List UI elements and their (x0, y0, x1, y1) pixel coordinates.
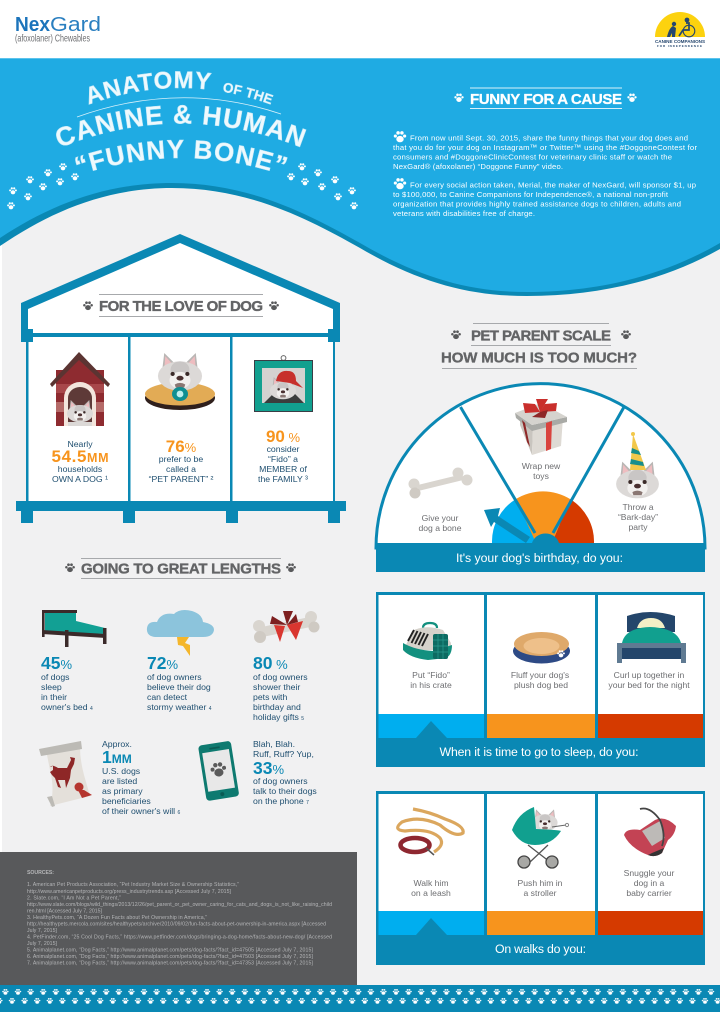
label: carrier: baby carrier (626, 888, 672, 898)
stat: 54.5MM households: 54.5MM (52, 447, 108, 466)
label: dog bed: plush dog bed (514, 680, 568, 690)
panel: sources: 2. Slate.com, “I Am Not a Pet Parent,” (27, 896, 121, 902)
stat: 33% talk on phone: on the phone 7 (253, 796, 309, 806)
label: leash (411, 878, 451, 898)
stat: 72% stormy weather: stormy weather 4 (147, 702, 212, 712)
stat: 45% sleep in bed: owner's bed 4 (41, 702, 93, 712)
icon: phone (198, 741, 239, 801)
panel: sources: 1. American Pet Products Association, “Pet Industry Market Size & Ownership Statistics,” (27, 882, 239, 888)
gauge dial (460, 407, 624, 543)
stat: 90% member of family: MEMBER of (259, 464, 307, 474)
header wave (0, 58, 720, 296)
stat: 54.5MM households: Nearly (67, 439, 93, 449)
icon: leash and collar (398, 809, 463, 855)
text block: campaign: consumers and #DoggoneClinicContest for veterinary clinic staff or watch the (393, 152, 672, 162)
label: dog bed: Fluff your dog's (511, 670, 569, 680)
icon: stroller (512, 807, 569, 868)
label: give a bone: dog a bone (418, 523, 462, 533)
footer paw band (0, 985, 720, 1012)
stat: 80% gifts: pets with (253, 692, 287, 702)
stat: 54.5MM households: households (58, 464, 103, 474)
text block: campaign: to $100,000, to Canine Companions for Independence®, a national non-profit (393, 190, 669, 199)
text block: campaign: organization that provides highly trained assistance dogs to children, adults and (393, 200, 681, 208)
logo: NexGard: Nex (15, 14, 50, 36)
stat: 33% talk on phone: talk to their dogs (253, 786, 317, 796)
title: ANATOMY (88, 71, 212, 105)
stat: 54.5MM households: OWN A DOG ¹ (52, 474, 108, 484)
logo: Canine Companions: FOR INDEPENDENCE (657, 44, 702, 48)
title (56, 71, 306, 171)
icon: baby carrier (624, 808, 676, 856)
stat: 45% sleep in bed: of dogs (41, 672, 70, 682)
stat: 54.5MM households (52, 439, 108, 484)
panel: sources: ren.html [Accessed July 7, 2015] (27, 908, 103, 914)
heading: Funny for a Cause: FUNNY FOR A CAUSE (470, 91, 622, 108)
panel: sources: 6. Animalplanet.com, “Dog Facts,” http://www.animalplanet.com/pets/dog-facts/?fact_id=47503 [Accessed July 7, 2015] (27, 954, 314, 960)
icon: storm cloud (147, 610, 214, 656)
left margin strip (0, 58, 2, 1012)
heading: Going to Great Lengths: GOING TO GREAT LENGTHS (81, 560, 281, 578)
stat: 76% pet parent: prefer to be (159, 454, 203, 464)
panel: sources: http://healthypets.mercola.com/sites/healthypets/archive/2010/09/02/fun-facts-about-pet-ownership-in-america.aspx [Accessed (27, 922, 326, 928)
title: OF THE (223, 82, 274, 105)
white top band (0, 0, 720, 58)
label: throw a party: Throw a (622, 502, 654, 512)
stat: 90% member of family: 90 % (266, 427, 300, 446)
panel: sources: http://www.slate.com/blogs/wild_things/2013/12/26/pet_parent_or_pet_owner_caring_for_cats_and_dogs_is_not_like_raising_child (27, 902, 332, 908)
stat: 1MM beneficiaries: beneficiaries (102, 796, 151, 806)
label: wrap new toys: Wrap new (522, 461, 561, 471)
panel: sleep (376, 592, 705, 767)
caption bar: On walks do you: (495, 942, 586, 956)
panel: birthday gauge (376, 384, 705, 572)
stat: 90% member of family: consider (267, 444, 300, 454)
heading: Pet Parent Scale: PET PARENT SCALE (471, 328, 611, 344)
label: leash: on a leash (411, 888, 451, 898)
stat: 33% talk on phone: of dog owners (253, 776, 308, 786)
icon: bone with bow (253, 611, 320, 643)
label: throw a party (618, 502, 658, 532)
stat: 1MM beneficiaries: U.S. dogs (102, 766, 141, 776)
caption bar (376, 543, 705, 572)
panel: sources: 3. HealthyPets.com, “A Dozen Fun Facts about Pet Ownership in America,” (27, 915, 207, 921)
stat: 80% gifts: 80 % (253, 653, 288, 673)
logo: NexGard (15, 14, 101, 44)
stat: 1MM beneficiaries: of their owner's will 6 (102, 806, 181, 816)
text block: campaign (393, 131, 697, 218)
logo: NexGard: Gard (50, 14, 101, 36)
stat: 1MM beneficiaries: are listed (102, 776, 137, 786)
stat: 80% gifts: shower their (253, 682, 300, 692)
label: crate: in his crate (410, 680, 452, 690)
stat: 33% talk on phone: Ruff, Ruff? Yup, (253, 749, 314, 759)
label: wrap new toys (522, 461, 561, 481)
label: give a bone (418, 513, 462, 533)
label: stroller: a stroller (524, 888, 557, 898)
label: crate (410, 670, 452, 690)
stat: 90% member of family (258, 427, 308, 484)
logo: Canine Companions: CANINE COMPANIONS (655, 39, 706, 45)
logo: Canine Companions (655, 12, 706, 48)
heading: Pet Parent Scale: HOW MUCH IS TOO MUCH? (441, 350, 637, 366)
stat: 1MM beneficiaries: as primary (102, 786, 143, 796)
stat: 76% pet parent: called a (166, 464, 196, 474)
stat: 72% stormy weather: can detect (147, 692, 188, 702)
icon: crate (403, 623, 452, 660)
caption bar: It's your dog's birthday, do you: (456, 551, 623, 565)
label: dog bed (511, 670, 569, 690)
stat: 1MM beneficiaries: 1MM (102, 747, 132, 767)
stat: 45% sleep in bed: in their (41, 692, 67, 702)
panel: sources: 5. Animalplanet.com, “Dog Facts,” http://www.animalplanet.com/pets/dog-facts/?fact_id=47505 [Accessed July 7, 2015] (27, 948, 314, 954)
panel: sources: SOURCES: (27, 870, 54, 876)
label: crate: Put “Fido” (412, 670, 450, 680)
label: carrier: Snuggle your (624, 868, 674, 878)
stat: 80% gifts: holiday gifts 5 (253, 712, 304, 722)
stat: 90% member of family: the FAMILY ³ (258, 474, 308, 484)
icon: dog house (50, 352, 110, 426)
label: human bed: Curl up together in (614, 670, 685, 680)
icon: dog bed (513, 632, 570, 664)
panel: sources: 7. Animalplanet.com, “Dog Facts,” http://www.animalplanet.com/pets/dog-facts/?fact_id=47353 [Accessed July 7, 2015] (27, 960, 314, 966)
heading: Pet Parent Scale (441, 323, 637, 369)
text block: campaign: NexGard® (afoxolaner) “Doggone Funny” video. (393, 162, 563, 171)
icon: bone (408, 468, 472, 498)
stat: 72% stormy weather (147, 653, 212, 712)
stat: 1MM beneficiaries: Approx. (102, 739, 132, 749)
icon: framed dog portrait (254, 356, 313, 412)
panel: sources: July 7, 2015] (27, 941, 58, 947)
label: wrap new toys: toys (533, 471, 549, 481)
label: throw a party: party (628, 522, 648, 532)
text block: campaign: veterans with disabilities free of charge. (393, 209, 535, 218)
stat: 76% pet parent: 76% (166, 437, 197, 456)
label: stroller: Push him in (518, 878, 563, 888)
panel: sources: 4. PetFinder.com, “25 Cool Dog Facts,” https://www.petfinder.com/dogs/bringing-a-dog-home/facts-about-new-dog/ [Accessed (27, 934, 332, 940)
stat: 45% sleep in bed: 45% (41, 653, 72, 673)
header paw trails (7, 163, 358, 209)
stat: 33% talk on phone: 33% (253, 758, 284, 778)
icon: dog with pacifier (145, 353, 215, 410)
stat: 45% sleep in bed (41, 653, 93, 712)
text block: campaign: that you do for your dog on Instagram™ or Twitter™ using the #DoggoneContest for (393, 143, 697, 152)
logo: NexGard: (afoxolaner) Chewables (15, 34, 90, 44)
title: CANINE & HUMAN (56, 104, 306, 148)
heading: For the Love of Dog: FOR THE LOVE OF DOG (99, 298, 263, 315)
text block: campaign: From now until Sept. 30, 2015, share the funny things that your dog does and (410, 134, 688, 142)
label: carrier: dog in a (634, 878, 665, 888)
stat: 72% stormy weather: believe their dog (147, 682, 211, 692)
heading: For the Love of Dog (83, 294, 279, 317)
icon: gift box (515, 399, 567, 455)
stat: 76% pet parent (149, 437, 214, 484)
stat: 76% pet parent: “PET PARENT” ² (149, 474, 214, 484)
text block: campaign: For every social action taken, Merial, the maker of NexGard, will sponsor $1, up (410, 180, 696, 190)
panel: sources (0, 852, 357, 985)
icon: human bed (617, 612, 686, 663)
label: carrier (624, 868, 674, 898)
label: give a bone: Give your (422, 513, 459, 523)
panel: For the Love of Dog house (16, 234, 346, 523)
stat: 45% sleep in bed: sleep (41, 682, 62, 692)
stat: 72% stormy weather: 72% (147, 653, 178, 673)
label: leash: Walk him (413, 878, 449, 888)
stat: 90% member of family: “Fido” a (268, 454, 298, 464)
label: human bed (608, 670, 690, 690)
stat: 80% gifts (253, 653, 308, 722)
heading: Funny for a Cause (454, 88, 637, 109)
stat: 33% talk on phone: Blah, Blah. (253, 739, 295, 749)
stat: 72% stormy weather: of dog owners (147, 672, 202, 682)
panel: sources: July 7, 2015] (27, 928, 58, 934)
panel: walks (376, 791, 705, 965)
icon: bed (42, 610, 106, 647)
stat: 1MM beneficiaries (102, 739, 181, 816)
stat: 80% gifts: of dog owners (253, 672, 308, 682)
icon: dog with party hat (616, 432, 659, 498)
caption bar: When it is time to go to sleep, do you: (440, 745, 638, 759)
stat: 33% talk on phone (253, 739, 317, 806)
label: throw a party: “Bark-day” (618, 512, 658, 522)
label: stroller (518, 878, 563, 898)
icon: will scroll (39, 741, 92, 807)
panel: sources: http://www.americanpetproducts.org/press_industrytrends.asp [Accessed July 7, 2015] (27, 889, 232, 895)
stat: 80% gifts: birthday and (253, 702, 301, 712)
title: “FUNNY BONE” (75, 140, 288, 171)
label: human bed: your bed for the night (608, 680, 690, 690)
